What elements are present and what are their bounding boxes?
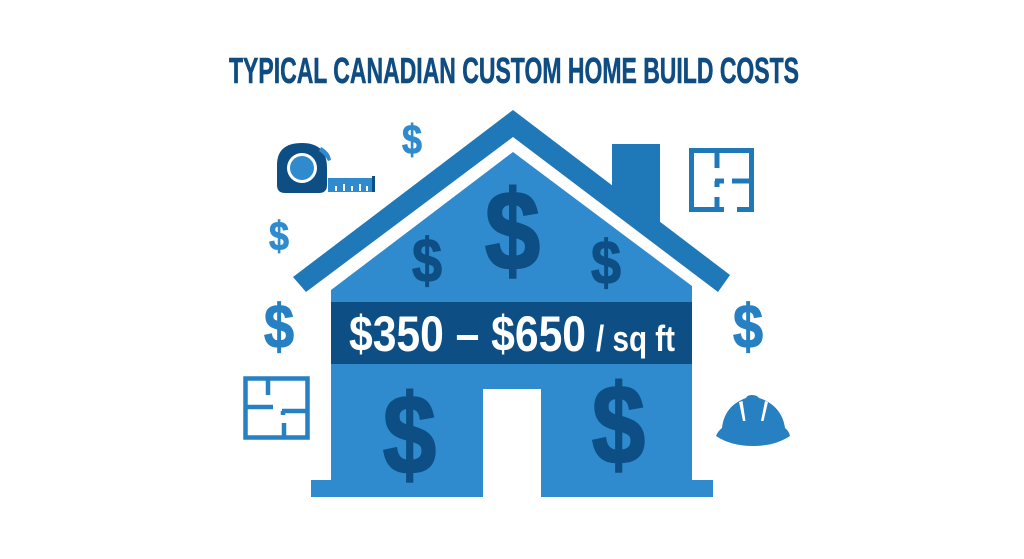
unit text: / sq ft (596, 318, 675, 359)
dollar sign: lower left: $ (383, 372, 436, 497)
icon: floor plan top right (692, 150, 752, 210)
dollar sign: roof left: $ (412, 227, 442, 296)
dollar sign: lower right: $ (592, 362, 645, 487)
dollar sign: roof right: $ (591, 229, 621, 298)
house illustration (293, 110, 730, 497)
dollar sign: roof centre: $ (485, 168, 540, 293)
dollar sign: middle left floating: $ (264, 293, 294, 362)
chimney (612, 144, 660, 226)
dollar sign: middle right floating: $ (733, 293, 763, 362)
house body (311, 152, 713, 497)
price band (331, 302, 692, 364)
icon: tape measure (277, 143, 375, 193)
icon: floor plan bottom left (246, 378, 308, 438)
dollar sign: top floating: $ (402, 116, 422, 163)
dollar sign: upper left floating: $ (269, 213, 289, 259)
icon: hard hat (716, 395, 790, 446)
roof (293, 110, 730, 292)
door (483, 389, 541, 497)
price text: $350 – $650 (349, 306, 586, 362)
